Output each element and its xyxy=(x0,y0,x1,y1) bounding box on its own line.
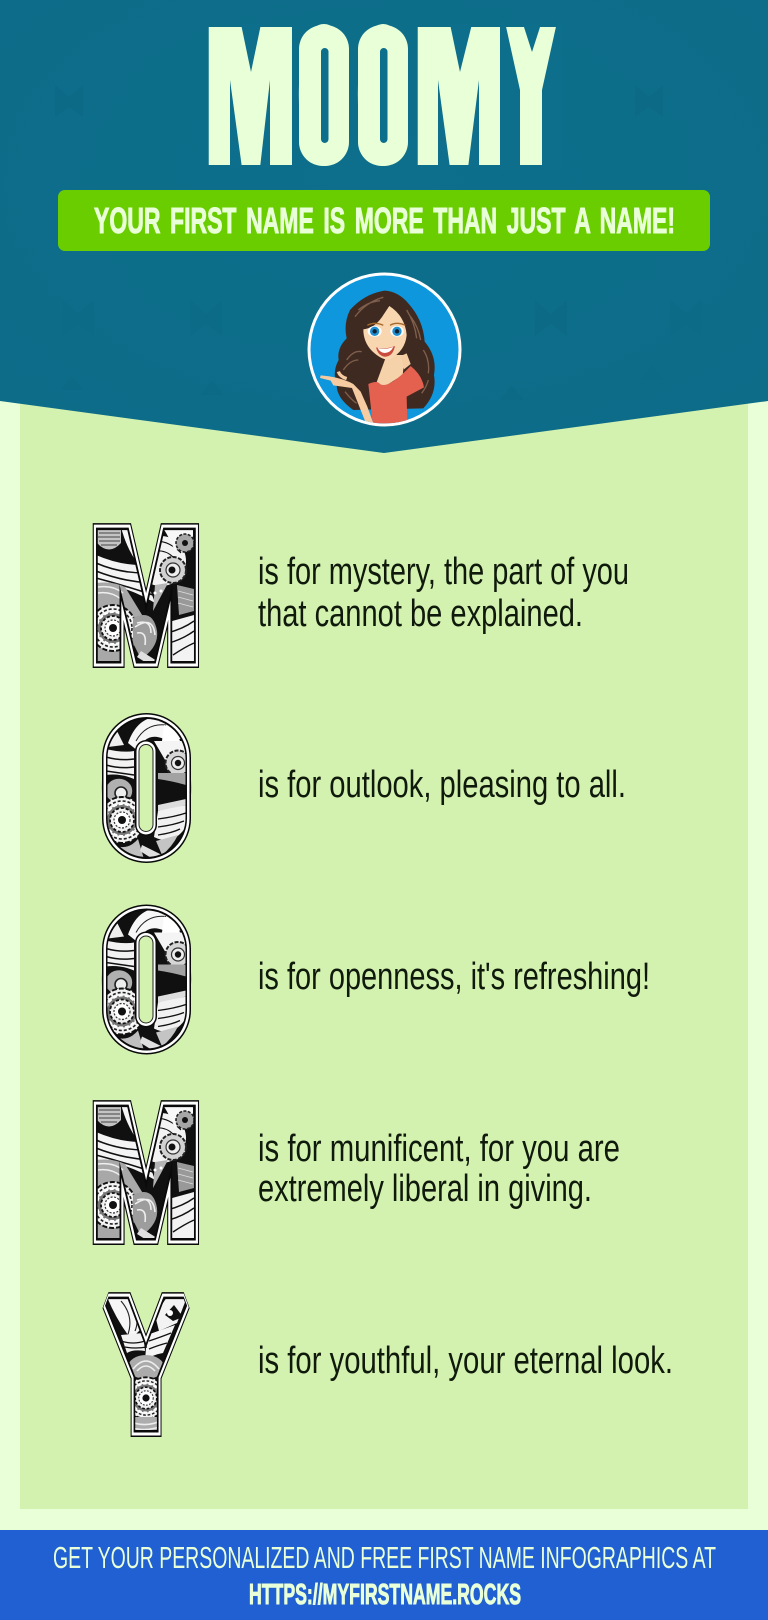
text: openness: is for openness, it's refreshing! xyxy=(258,956,650,998)
letter Y: Y xyxy=(106,1265,186,1465)
text: mystery: is for mystery, the part of you xyxy=(258,551,629,593)
icon: woman avatar xyxy=(308,272,462,426)
letter M (first): M xyxy=(92,496,200,696)
letter M (second): M xyxy=(92,1073,200,1273)
letter Y: Y xyxy=(106,1265,186,1465)
letter M (first): M xyxy=(92,496,200,696)
text: munificent: is for munificent, for you are xyxy=(258,1128,620,1170)
title xyxy=(204,0,562,202)
letter O (second) xyxy=(102,904,192,1054)
text: munificent xyxy=(258,1128,620,1210)
footer xyxy=(0,1530,768,1620)
text: mystery: that cannot be explained. xyxy=(258,593,583,635)
text: mystery xyxy=(258,551,629,635)
text: outlook: is for outlook, pleasing to all. xyxy=(258,764,626,806)
letter O (first) xyxy=(102,713,192,863)
footer: HTTPS://MYFIRSTNAME.ROCKS xyxy=(249,1579,521,1611)
letter M (first): M xyxy=(92,496,200,696)
text: munificent: extremely liberal in giving. xyxy=(258,1168,592,1210)
letter O (second): O xyxy=(100,871,193,1089)
letter Y xyxy=(102,1292,190,1437)
header banner xyxy=(0,0,768,453)
letter Y: Y xyxy=(106,1265,186,1465)
tagline bar xyxy=(58,190,710,251)
letter O (first): O xyxy=(100,679,193,898)
letter M (second): M xyxy=(92,1073,200,1273)
panel: letters content xyxy=(20,380,748,1509)
letter M (second): M xyxy=(92,1073,200,1273)
